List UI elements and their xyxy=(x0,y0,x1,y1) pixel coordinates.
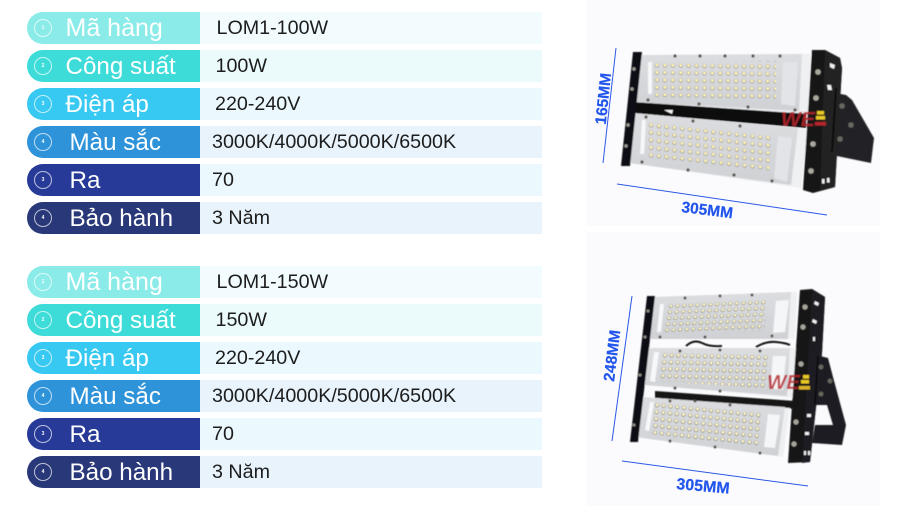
row: Điện áp xyxy=(27,88,542,120)
row: Bảo hành xyxy=(27,202,542,234)
dimension: 305MM width, bottom product: 305MM xyxy=(676,476,730,498)
icon: mounting stand xyxy=(832,93,874,163)
watermark: WE logo: WE xyxy=(767,372,801,394)
row: Ra: 3 xyxy=(42,177,44,183)
row: Mã hàng xyxy=(27,12,542,44)
row: Ra: 70 xyxy=(212,169,234,191)
row: Bảo hành xyxy=(27,456,542,488)
icon: lower cross band xyxy=(655,391,795,409)
row: Ra: Ra xyxy=(70,421,100,448)
dimension: 165MM height: 165MM xyxy=(593,72,615,125)
icon: bottom LED module xyxy=(635,397,790,457)
row: Điện áp: Điện áp xyxy=(66,345,149,372)
dimension: 248MM height xyxy=(601,296,632,441)
icon: mounting stand xyxy=(812,354,846,445)
row: Ra xyxy=(27,418,542,450)
icon: middle LED module xyxy=(644,348,797,398)
row: Mã hàng: Mã hàng xyxy=(66,14,163,42)
panel: specification table 150W xyxy=(27,266,542,488)
row: Công suất: 2 xyxy=(42,63,44,69)
icon: right bracket xyxy=(803,50,854,193)
row: Mã hàng: Mã hàng xyxy=(66,268,163,296)
row: Công suất: Công suất xyxy=(66,307,176,334)
dimension: 248MM height: 248MM xyxy=(601,329,624,382)
row: Mã hàng: 1 xyxy=(42,25,44,31)
row: Điện áp: 220-240V xyxy=(215,347,300,369)
panel: photo background 150W xyxy=(586,232,880,506)
row: Mã hàng: LOM1-100W xyxy=(216,17,328,39)
icon: centre cross band xyxy=(632,102,806,128)
row: Điện áp: 220-240V xyxy=(215,93,300,115)
dimension: 305MM width, bottom product xyxy=(622,461,808,498)
row: Màu sắc xyxy=(27,126,542,158)
icon: left bracket xyxy=(630,296,655,442)
row: Ra xyxy=(27,164,542,196)
row: Màu sắc xyxy=(27,380,542,412)
row: Màu sắc: 4 xyxy=(42,139,44,145)
row: Bảo hành: 3 Năm xyxy=(212,461,270,483)
row: Bảo hành: 4 xyxy=(42,469,44,475)
dimension: 305MM width, top product: 305MM xyxy=(681,199,734,222)
dimension: 305MM width, top product xyxy=(617,184,827,222)
row: Bảo hành: Bảo hành xyxy=(70,205,173,232)
row: Công suất: 2 xyxy=(42,317,44,323)
row: Công suất: 150W xyxy=(216,309,267,331)
row: Công suất xyxy=(27,304,542,336)
row: Công suất: 100W xyxy=(216,55,267,77)
row: Bảo hành: 4 xyxy=(42,215,44,221)
row: Công suất xyxy=(27,50,542,82)
row: Điện áp: 3 xyxy=(42,101,44,107)
icon: upper LED module xyxy=(635,54,811,114)
dimension: 165MM height xyxy=(593,48,616,163)
panel: specification table 100W xyxy=(27,12,542,234)
row: Điện áp: Điện áp xyxy=(66,91,149,118)
row: Điện áp xyxy=(27,342,542,374)
row: Mã hàng xyxy=(27,266,542,298)
row: Bảo hành: Bảo hành xyxy=(70,459,173,486)
row: Công suất: Công suất xyxy=(66,53,176,80)
row: Mã hàng: 1 xyxy=(42,279,44,285)
icon: right bracket xyxy=(788,289,832,463)
photo: 150W floodlight with three modules xyxy=(630,289,846,463)
watermark: WE logo: WE xyxy=(781,109,816,131)
icon: lower LED module xyxy=(629,113,808,188)
row: Ra: 70 xyxy=(212,423,234,445)
panel: photo background 100W xyxy=(586,0,880,226)
row: Bảo hành: 3 Năm xyxy=(212,207,270,229)
row: Màu sắc: Màu sắc xyxy=(70,129,161,156)
row: Màu sắc: 4 xyxy=(42,393,44,399)
row: Điện áp: 3 xyxy=(42,355,44,361)
photo: 100W floodlight with two modules xyxy=(621,50,874,193)
icon: cables between modules xyxy=(686,342,790,347)
row: Màu sắc: Màu sắc xyxy=(70,383,161,410)
row: Mã hàng: LOM1-150W xyxy=(216,271,328,293)
row: Màu sắc: 3000K/4000K/5000K/6500K xyxy=(212,131,456,153)
icon: top LED module xyxy=(649,292,797,339)
row: Màu sắc: 3000K/4000K/5000K/6500K xyxy=(212,385,456,407)
icon: left bracket xyxy=(621,52,673,166)
row: Ra: 3 xyxy=(42,431,44,437)
row: Ra: Ra xyxy=(70,167,100,194)
